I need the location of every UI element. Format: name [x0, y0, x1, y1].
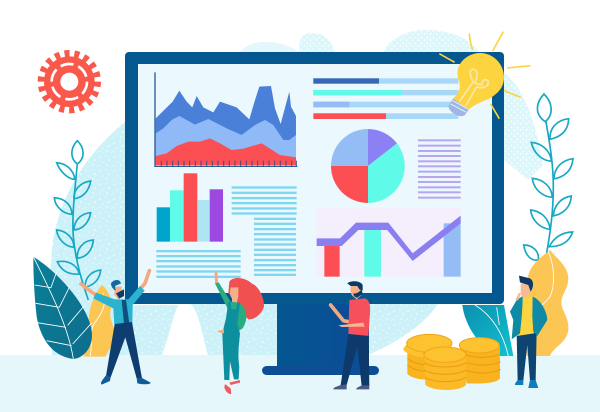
text lines: left column	[156, 186, 297, 278]
monitor	[125, 52, 504, 304]
background blobs	[50, 30, 543, 355]
teal leaf right and yellow plant right	[462, 250, 568, 356]
monitor stand	[262, 300, 379, 375]
gear icon	[41, 54, 97, 110]
bar chart	[157, 173, 223, 242]
light bulb icon	[439, 32, 531, 119]
person: bearded man in red shirt	[331, 281, 370, 389]
pie chart	[331, 129, 405, 203]
floor	[0, 355, 600, 412]
area chart	[155, 72, 297, 166]
person: man with raised arms	[81, 271, 151, 385]
progress bars	[313, 78, 458, 119]
text lines: purple	[418, 139, 461, 199]
big teal leaf left	[33, 257, 92, 359]
person: man in teal jacket	[510, 276, 547, 388]
yellow plant left	[83, 285, 115, 357]
right vine	[524, 94, 573, 260]
combo chart	[317, 208, 461, 277]
person: woman with red hair	[215, 273, 264, 394]
gold coin stacks	[403, 334, 501, 390]
left vine	[54, 141, 101, 300]
